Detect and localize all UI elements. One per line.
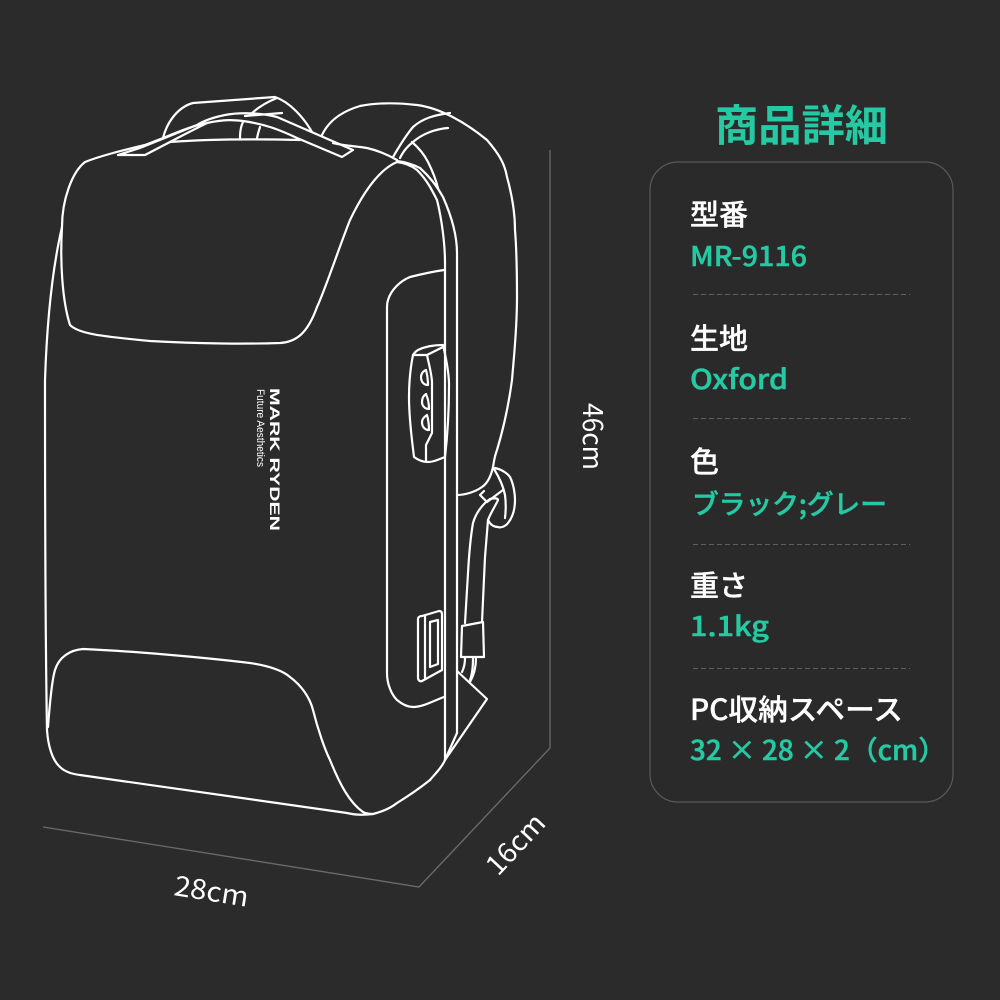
- combination lock: [409, 345, 449, 462]
- spec: PC storage: [690, 687, 946, 768]
- side strap and buckle: [488, 468, 515, 527]
- spec: PC storage: PC収納スペース: [690, 687, 903, 729]
- top flap panel: [61, 145, 397, 344]
- usb port: [418, 611, 442, 681]
- body outer left edge: [45, 227, 62, 730]
- spec: model number: 型番: [690, 192, 748, 234]
- spec: weight: 重さ: [690, 563, 748, 605]
- spec: colour: ブラック;グレー: [692, 483, 887, 522]
- brand tagline: Future Aesthetics: [254, 389, 266, 467]
- spec: PC storage: 32 × 28 × 2（cm）: [690, 729, 946, 768]
- dimension label: width: 28cm: [172, 864, 252, 915]
- side gusset lines: [397, 162, 445, 760]
- bottom panel: [48, 649, 373, 814]
- body top line and handle arcs: [170, 98, 300, 142]
- dimension label: depth: 16cm: [475, 803, 553, 882]
- spec: model number: [690, 192, 807, 274]
- shoulder strap outer: [322, 103, 517, 495]
- spec: model number: MR-9116: [690, 235, 807, 274]
- spec: material: 生地: [690, 316, 748, 358]
- spec: material: [690, 316, 788, 397]
- handle strap: [118, 113, 353, 157]
- panel: product details: [650, 162, 953, 802]
- flap top edge: [145, 123, 397, 160]
- shoulder strap inner curves: [393, 113, 450, 188]
- bottom tag triangle: [445, 671, 487, 760]
- brand name: MARK RYDEN: [267, 388, 283, 531]
- dimension lines: [43, 150, 550, 887]
- backpack line drawing: [45, 97, 517, 815]
- spec: weight: 1.1kg: [690, 605, 769, 644]
- top carry handle loop: [163, 97, 312, 138]
- title: 商品詳細: [715, 92, 888, 154]
- dimension label: height: 46cm: [575, 403, 614, 470]
- spec: colour: 色: [690, 439, 719, 481]
- spec: colour: [690, 439, 887, 522]
- side pocket panel: [387, 270, 444, 707]
- spec: weight: [690, 563, 769, 644]
- spec: material: Oxford: [690, 358, 788, 397]
